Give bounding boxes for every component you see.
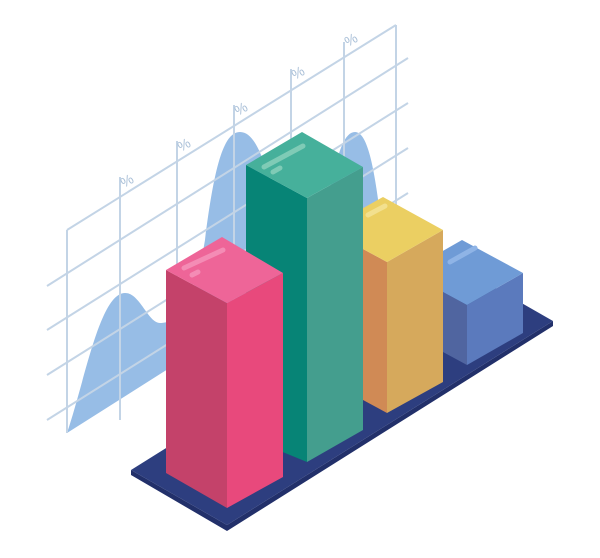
percent labels: % bbox=[174, 135, 193, 155]
bar: blue bbox=[406, 240, 523, 365]
bar: pink bbox=[166, 237, 283, 508]
percent labels: % bbox=[118, 171, 136, 191]
bar: yellow bbox=[326, 197, 443, 413]
background chart: grid bbox=[47, 25, 408, 433]
bar: green bbox=[246, 132, 363, 462]
percent labels: % bbox=[342, 30, 360, 50]
platform base bbox=[131, 266, 553, 531]
background chart: area curves bbox=[67, 132, 400, 433]
percent labels bbox=[118, 30, 360, 191]
percent labels: % bbox=[232, 99, 250, 119]
percent labels: % bbox=[288, 63, 307, 83]
